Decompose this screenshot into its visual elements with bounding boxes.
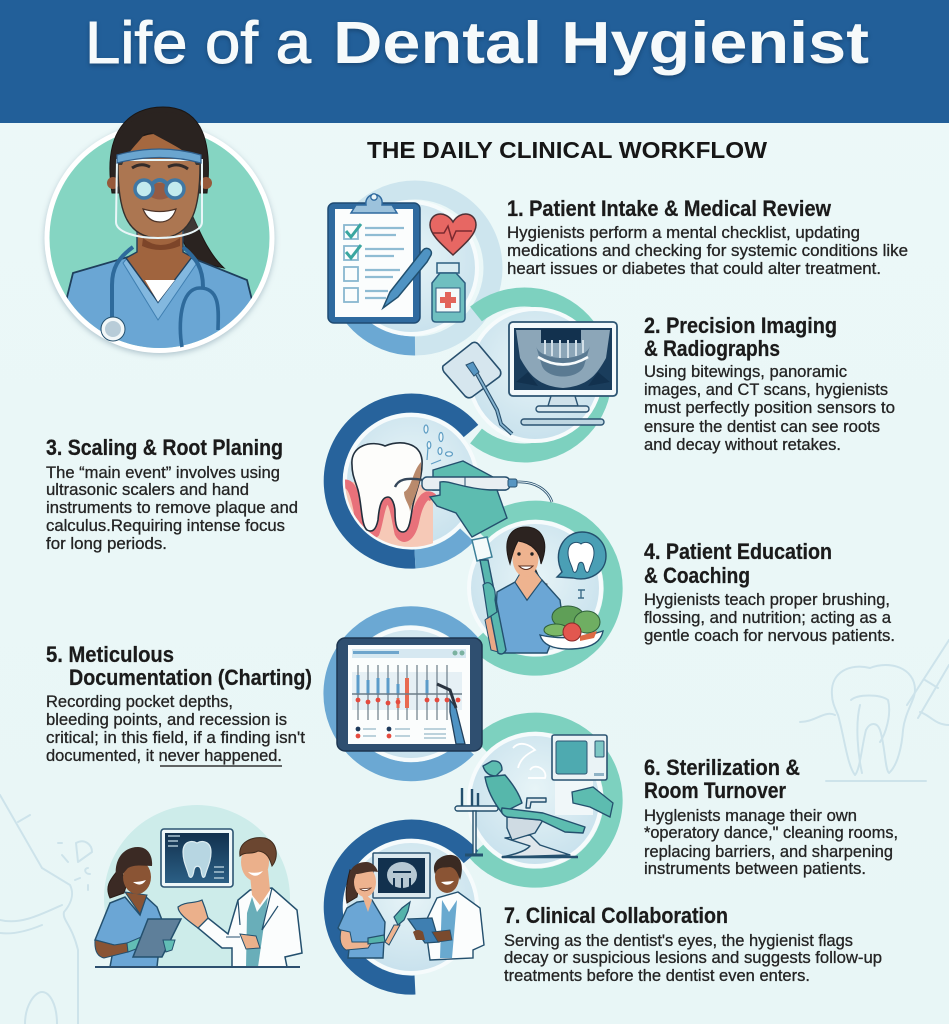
- text block: step 5: [46, 642, 312, 766]
- workflow ribbon rings: [333, 190, 613, 985]
- text block: step 3: instruments to remove plaque and: [46, 498, 298, 517]
- title: Dental Hygienist: [333, 10, 869, 76]
- title: [85, 10, 869, 76]
- icon: x-ray monitor: [509, 322, 617, 425]
- text block: step 5: critical; in this field, if a finding isn't: [46, 728, 305, 747]
- icon: tablet with periodontal chart: [337, 638, 482, 751]
- icon: medicine bottle: [432, 263, 465, 322]
- icon: speech bubble tooth: [557, 532, 606, 598]
- text block: step 3: 3. Scaling & Root Planing: [46, 435, 283, 460]
- text block: step 7: 7. Clinical Collaboration: [504, 903, 728, 928]
- text block: step 2: ensure the dentist can see roots: [644, 417, 880, 436]
- watermark: instrument and spray: [0, 795, 92, 1024]
- text block: step 7: decay or suspicious lesions and suggests follow-up: [504, 948, 882, 967]
- text block: step 6: Hyglenists manage their own: [644, 806, 857, 825]
- illustration: hygienist and dentist consulting: [94, 805, 303, 968]
- text block: step 2: must perfectly position sensors to: [644, 398, 895, 417]
- icon: x-ray display, collaboration: [373, 853, 430, 898]
- icon: dental chair: [483, 761, 585, 857]
- text block: step 5: Recording pocket depths,: [46, 692, 233, 711]
- text block: step 4: 4. Patient Education: [644, 539, 832, 564]
- icon: clipboard with checklist: [328, 194, 420, 323]
- text block: step 1: [507, 196, 908, 278]
- text block: step 4: Hygienists teach proper brushing,: [644, 590, 890, 609]
- icon: autoclave unit: [513, 735, 607, 815]
- icon: pen: [383, 248, 431, 308]
- icon: instrument tray: [455, 788, 498, 855]
- text block: step 3: [46, 435, 298, 553]
- title: Life of a: [85, 10, 311, 76]
- text block: step 1: heart issues or diabetes that could alter treatment.: [507, 259, 881, 278]
- text block: step 4: flossing, and nutrition; acting as a: [644, 608, 892, 627]
- text block: step 5: 5. Meticulous: [46, 642, 174, 667]
- icon: toothbrush: [472, 537, 506, 654]
- text block: step 2: 2. Precision Imaging: [644, 313, 837, 338]
- portrait: hygienist with face shield: [44, 107, 274, 360]
- text block: step 5: bleeding points, and recession is: [46, 710, 287, 729]
- text block: step 6: Room Turnover: [644, 778, 786, 803]
- text block: step 3: The “main event” involves using: [46, 463, 280, 482]
- text block: step 2: [644, 313, 895, 454]
- icon: gloved hand wiping: [572, 787, 613, 817]
- text block: step 2: images, and CT scans, hygienists: [644, 380, 888, 399]
- icon: hygienist, collaboration: [338, 862, 410, 958]
- text block: step 6: replacing barriers, and sharpening: [644, 842, 893, 861]
- text block: step 1: Hygienists perform a mental checklist, updating: [507, 223, 860, 242]
- icon: heart: [430, 214, 476, 255]
- text block: step 6: 6. Sterilization &: [644, 755, 800, 780]
- text block: step 7: Serving as the dentist's eyes, the hygienist flags: [504, 931, 853, 950]
- text block: step 1: 1. Patient Intake & Medical Review: [507, 196, 831, 221]
- heading: the daily clinical workflow: THE DAILY CLINICAL WORKFLOW: [367, 137, 767, 163]
- icon: salad plate: [540, 606, 603, 649]
- text block: step 4: & Coaching: [644, 563, 750, 588]
- icon: dentist, collaboration: [408, 855, 484, 960]
- text block: step 6: *operatory dance," cleaning rooms,: [644, 823, 898, 842]
- icon: patient educator with toothbrush: [496, 527, 562, 653]
- icon: imaging sensor and cable: [443, 342, 512, 434]
- text block: step 2: & Radiographs: [644, 336, 780, 361]
- text block: step 4: gentle coach for nervous patients.: [644, 626, 895, 645]
- icon: scaler and gloved hand: [395, 461, 552, 537]
- text block: step 7: treatments before the dentist even enters.: [504, 966, 810, 985]
- text block: step 4: [644, 539, 895, 645]
- text block: step 7: [504, 903, 882, 985]
- text block: step 3: ultrasonic scalers and hand: [46, 480, 249, 499]
- text block: step 3: for long periods.: [46, 534, 167, 553]
- text block: step 3: calculus.Requiring intense focus: [46, 516, 285, 535]
- text block: step 2: and decay without retakes.: [644, 435, 841, 454]
- text block: step 6: [644, 755, 898, 878]
- icon: tooth and gums: [340, 425, 452, 550]
- text block: step 5: documented, it never happened.: [46, 746, 282, 765]
- text block: step 2: Using bitewings, panoramic: [644, 362, 847, 381]
- text block: step 1: medications and checking for systemic conditions like: [507, 241, 908, 260]
- text block: step 6: instruments between patients.: [644, 859, 866, 878]
- text block: step 5: Documentation (Charting): [69, 665, 312, 690]
- header banner: [0, 0, 949, 123]
- watermark: tooth with scaler: [800, 640, 949, 781]
